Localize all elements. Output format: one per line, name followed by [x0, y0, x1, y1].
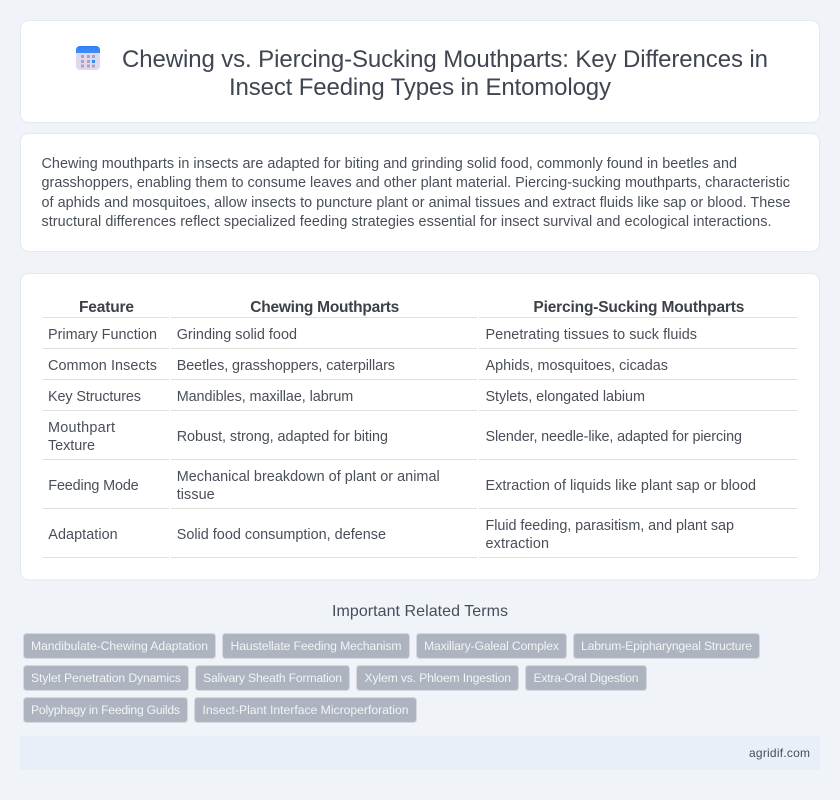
- table row: feeding mode: Extraction of liquids like plant sap or blood: [486, 478, 756, 494]
- table row: key structures: Stylets, elongated labium: [486, 389, 645, 405]
- table row: primary function: Grinding solid food: [177, 327, 297, 343]
- table row: common insects: Beetles, grasshoppers, caterpillars: [177, 358, 395, 374]
- table row: adaptation: Adaptation: [48, 527, 118, 543]
- table row: mouthpart texture: Slender, needle-like, adapted for piercing: [486, 429, 742, 445]
- panel: introduction text: [20, 134, 820, 252]
- table row: key structures: [48, 389, 645, 405]
- related term tags: Salivary Sheath Formation: [203, 671, 342, 685]
- table row: primary function: Penetrating tissues to suck fluids: [486, 327, 697, 343]
- icon: calendar: [76, 46, 100, 70]
- table row: feeding mode: Feeding Mode: [48, 478, 139, 494]
- title: Insect Feeding Types in Entomology: [229, 74, 611, 101]
- panel: introduction text: Chewing mouthparts in insects are adapted for biting and grinding solid food, commonly found in beetles and: [42, 156, 737, 172]
- footer: [20, 736, 820, 770]
- related term tags: Stylet Penetration Dynamics: [31, 671, 181, 685]
- table row: adaptation: [48, 518, 734, 552]
- table row: adaptation: Solid food consumption, defense: [177, 527, 386, 543]
- table row: mouthpart texture: [48, 420, 742, 454]
- title: Chewing vs. Piercing-Sucking Mouthparts: Key Differences in: [122, 46, 768, 73]
- title: [122, 46, 768, 101]
- related term tags: Extra-Oral Digestion: [534, 671, 638, 685]
- related term tags: Xylem vs. Phloem Ingestion: [364, 671, 511, 685]
- table row: adaptation: Fluid feeding, parasitism, and plant sap: [486, 518, 734, 534]
- table row: common insects: Aphids, mosquitoes, cicadas: [486, 358, 668, 374]
- table row: mouthpart texture: Mouthpart: [48, 420, 115, 436]
- related term tags: Insect-Plant Interface Microperforation: [202, 703, 408, 717]
- related term tags: Polyphagy in Feeding Guilds: [31, 703, 180, 717]
- table row: key structures: Mandibles, maxillae, labrum: [177, 389, 353, 405]
- table row: mouthpart texture: Texture: [48, 438, 95, 454]
- table row: primary function: Primary Function: [48, 327, 157, 343]
- footer: agridif.com: [749, 746, 810, 760]
- table row: key structures: Key Structures: [48, 389, 141, 405]
- table row: adaptation: extraction: [486, 536, 549, 552]
- panel: introduction text: of aphids and mosquitoes, allow insects to puncture plant or animal tissues and extract fluids like sap or blood. These: [42, 195, 790, 211]
- table header row: Piercing-Sucking Mouthparts: [533, 299, 744, 316]
- table row: feeding mode: Mechanical breakdown of plant or animal: [177, 469, 440, 485]
- table header row: Feature: [79, 299, 134, 316]
- table row: primary function: [48, 327, 697, 343]
- panel: introduction text: structural differences reflect specialized feeding strategies essential for insect survival and ecological interactions.: [42, 214, 772, 230]
- panel: comparison table: [20, 274, 820, 580]
- table header row: Chewing Mouthparts: [250, 299, 399, 316]
- related term tags: Mandibulate-Chewing Adaptation: [31, 639, 208, 653]
- table row: feeding mode: [48, 469, 756, 503]
- table row: common insects: Common Insects: [48, 358, 157, 374]
- panel: title header: [20, 20, 820, 122]
- table row: feeding mode: tissue: [177, 487, 215, 503]
- related term tags: [24, 634, 760, 722]
- heading: important related terms: Important Related Terms: [332, 603, 508, 620]
- related term tags: Labrum-Epipharyngeal Structure: [581, 639, 752, 653]
- table row: mouthpart texture: Robust, strong, adapted for biting: [177, 429, 388, 445]
- related term tags: Haustellate Feeding Mechanism: [230, 639, 402, 653]
- table header row: [79, 299, 744, 316]
- related term tags: Maxillary-Galeal Complex: [424, 639, 559, 653]
- table row: common insects: [48, 358, 668, 374]
- panel: introduction text: grasshoppers, enabling them to consume leaves and other plant material. Piercing-sucking mouthparts, characteristic: [42, 175, 790, 191]
